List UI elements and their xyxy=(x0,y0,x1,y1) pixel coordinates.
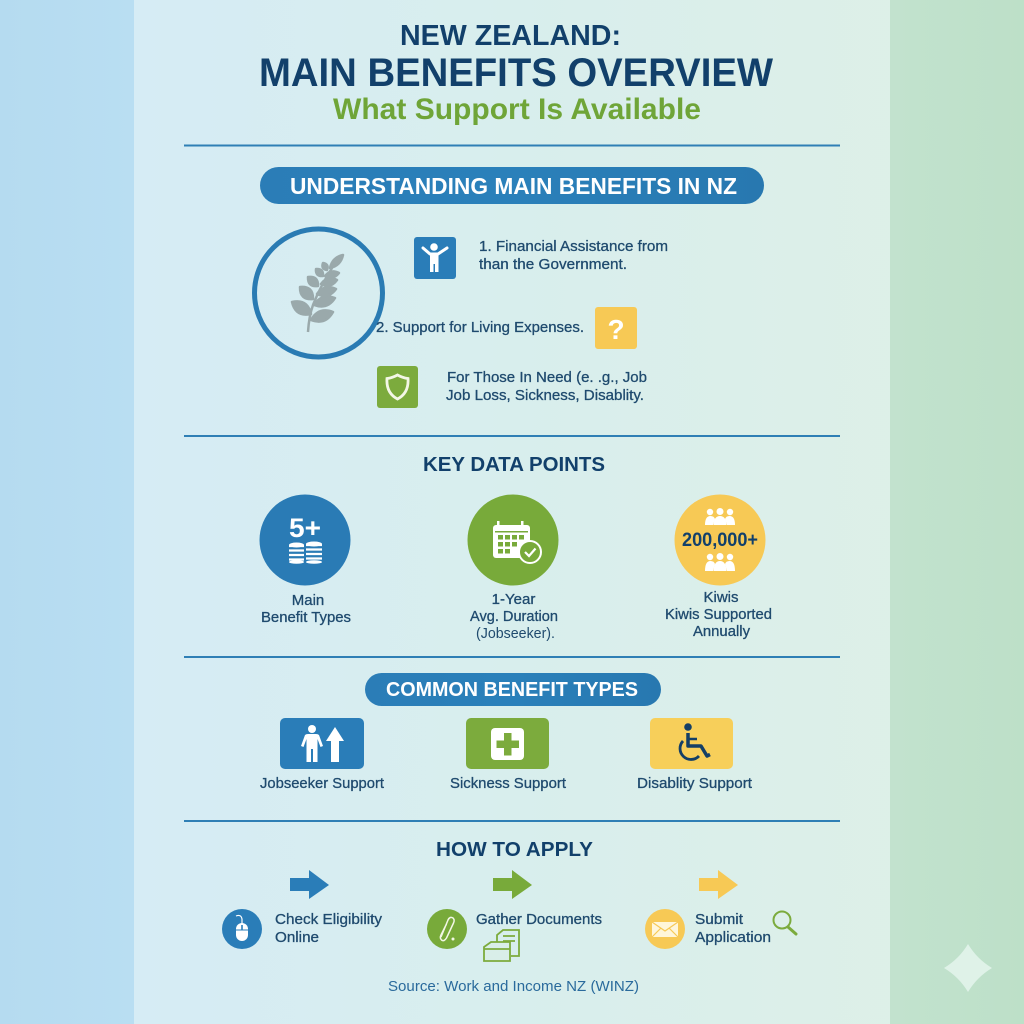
source note: Source: Work and Income NZ (WINZ) xyxy=(388,978,639,995)
stat: 200,000+ kiwis supported: Annually xyxy=(693,623,750,640)
text: financial assistance: 1. Financial Assistance from xyxy=(479,238,668,255)
text: those in need xyxy=(446,369,647,404)
arrow: green xyxy=(493,870,532,899)
card: sickness support xyxy=(450,718,567,792)
card: disability support xyxy=(637,718,753,792)
stat: 200,000+ kiwis supported: Kiwis xyxy=(703,589,739,606)
text: financial assistance: than the Government. xyxy=(479,256,627,273)
step: submit application: Application xyxy=(695,929,771,946)
heading: understanding main benefits xyxy=(260,167,764,204)
icon: sparkle xyxy=(944,944,992,992)
title: NEW ZEALAND: xyxy=(400,20,621,52)
step: check eligibility online xyxy=(222,909,382,949)
stat: 200,000+ kiwis supported xyxy=(665,494,772,640)
stat: 5+ main benefit types xyxy=(260,494,351,626)
step: check eligibility online: Check Eligibility xyxy=(275,911,382,928)
card: jobseeker support: Jobseeker Support xyxy=(260,775,385,792)
card: jobseeker support xyxy=(260,718,385,792)
text: living expenses: 2. Support for Living Expenses. xyxy=(376,319,584,336)
step: check eligibility online: Online xyxy=(275,929,319,946)
icon: shield xyxy=(377,366,418,408)
stat: 200,000+ kiwis supported: Kiwis Supported xyxy=(665,606,772,623)
icon: fern in circle xyxy=(254,229,382,357)
step: submit application xyxy=(645,909,796,949)
text: financial assistance xyxy=(479,238,668,273)
text: those in need: Job Loss, Sickness, Disablity. xyxy=(446,387,644,404)
heading: understanding main benefits: UNDERSTANDING MAIN BENEFITS IN NZ xyxy=(290,173,737,199)
stat: 5+ main benefit types: Benefit Types xyxy=(261,609,351,626)
icon: question mark: ? xyxy=(607,314,625,345)
stat: 1-year average duration: Avg. Duration xyxy=(470,608,558,625)
arrow: yellow xyxy=(699,870,738,899)
heading: key data points: KEY DATA POINTS xyxy=(423,454,605,476)
heading: common benefit types: COMMON BENEFIT TYPES xyxy=(386,679,638,701)
stat: 5+ main benefit types: 5+ xyxy=(289,513,321,543)
stat: 1-year average duration xyxy=(468,494,558,642)
arrow: blue xyxy=(290,870,329,899)
stat: 1-year average duration: (Jobseeker). xyxy=(476,625,555,642)
text: those in need: For Those In Need (e. .g., Job xyxy=(447,369,647,386)
step: submit application: Submit xyxy=(695,911,744,928)
stat: 1-year average duration: 1-Year xyxy=(492,591,535,608)
heading: common benefit types xyxy=(365,673,661,706)
icon: person in blue square xyxy=(414,237,456,279)
card: disability support: Disablity Support xyxy=(637,775,753,792)
icon: question mark xyxy=(595,307,637,349)
card: sickness support: Sickness Support xyxy=(450,775,567,792)
title: What Support Is Available xyxy=(333,93,701,126)
title: MAIN BENEFITS OVERVIEW xyxy=(259,51,773,95)
title xyxy=(259,20,773,126)
step: gather documents xyxy=(427,909,602,961)
stat: 200,000+ kiwis supported: 200,000+ xyxy=(682,530,758,551)
heading: how to apply: HOW TO APPLY xyxy=(436,839,594,861)
stat: 5+ main benefit types: Main xyxy=(292,592,324,609)
step: gather documents: Gather Documents xyxy=(476,911,602,928)
